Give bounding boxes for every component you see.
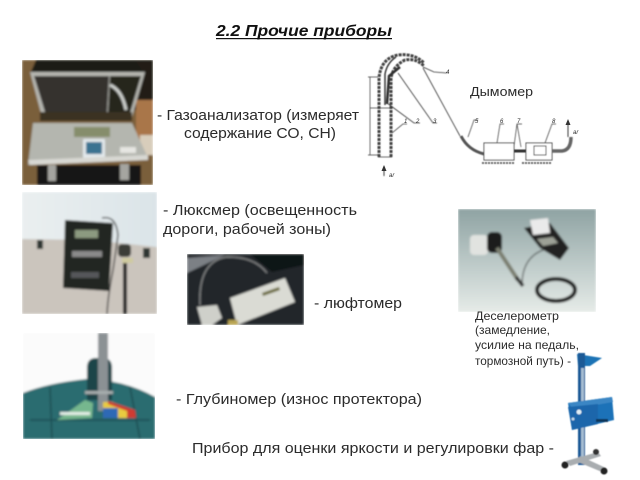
diagram: smoke meter [368,55,571,176]
label: tread depth gauge: - Глубиномер (износ протектора) [176,391,422,408]
diagram part numbers: 8 [552,119,556,125]
label: decelerometer: (замедление, [475,323,550,337]
label: decelerometer: усилие на педаль, [475,338,579,352]
icon: flow arrows [382,119,579,179]
label: decelerometer [475,309,579,368]
photo: gas analyzer [22,60,153,185]
label: decelerometer: тормозной путь) - [475,354,571,368]
photo: luxmeter [22,192,157,314]
label: smoke meter: Дымомер [470,84,533,99]
diagram part numbers: 2 [415,119,420,125]
label: headlight tester: Прибор для оценки яркости и регулировки фар - [192,440,554,457]
photo: backlash meter [187,254,304,325]
label: backlash meter: - люфтомер [314,295,402,312]
icon: flow arrows: ar [573,130,579,136]
diagram part numbers: 6 [500,119,504,125]
label: luxmeter [163,202,357,238]
label: luxmeter: - Люксмер (освещенность [163,202,357,219]
label: gas analyzer: - Газоанализатор (измеряет [157,107,359,124]
label: luxmeter: дороги, рабочей зоны) [163,221,331,238]
diagram part numbers: 7 [517,119,521,125]
title: 2.2 Прочие приборы [215,23,392,40]
icon: flow arrows: ar [389,173,395,179]
diagram part numbers: 5 [475,119,479,125]
label: gas analyzer [157,107,359,142]
photo: tread depth gauge [23,333,155,439]
diagram part numbers: 4 [446,70,450,76]
diagram part numbers: 1 [404,119,407,125]
label: decelerometer: Деселерометр [475,309,559,323]
photo: decelerometer [458,209,596,312]
label: gas analyzer: содержание СО, СН) [184,125,336,142]
photo: headlight tester [562,353,614,474]
diagram part numbers [404,70,556,125]
diagram part numbers: 3 [433,119,437,125]
